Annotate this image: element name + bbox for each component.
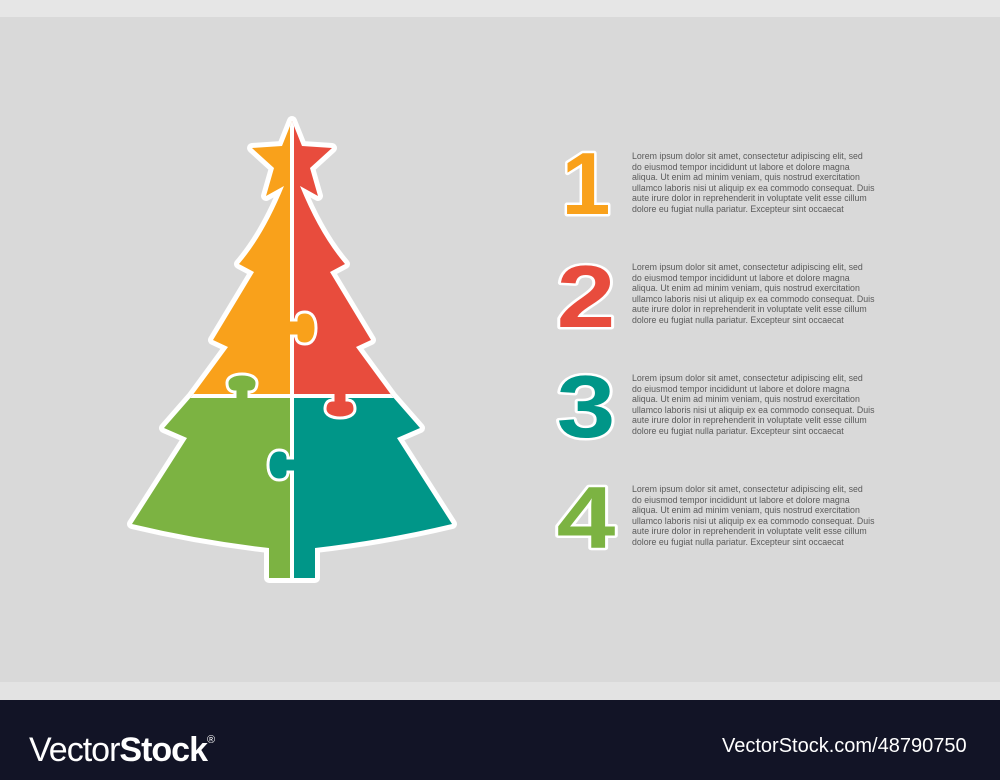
text block 1: dolore eu fugiat nulla pariatur. Excepteur sint occaecat xyxy=(632,204,844,214)
text block 3 xyxy=(632,373,875,436)
text block 2: ullamco laboris nisi ut aliquip ex ea commodo consequat. Duis xyxy=(632,294,875,304)
text block 1: ullamco laboris nisi ut aliquip ex ea commodo consequat. Duis xyxy=(632,183,875,193)
text block 4: Lorem ipsum dolor sit amet, consectetur adipiscing elit, sed xyxy=(632,484,863,494)
text block 3: ullamco laboris nisi ut aliquip ex ea commodo consequat. Duis xyxy=(632,405,875,415)
number 4: 4 xyxy=(557,468,615,567)
number 2: 2 xyxy=(557,247,615,346)
text block 2: Lorem ipsum dolor sit amet, consectetur adipiscing elit, sed xyxy=(632,262,863,272)
piece 4 green xyxy=(132,396,290,578)
puzzle pieces xyxy=(132,121,452,578)
text block 2 xyxy=(632,262,875,325)
number 1: 1 xyxy=(562,134,610,233)
text block 1: aute irure dolor in reprehenderit in voluptate velit esse cillum xyxy=(632,193,867,203)
tab red xyxy=(325,396,355,418)
text block 1: do eiusmod tempor incididunt ut labore et dolore magna xyxy=(632,162,850,172)
text block 4: do eiusmod tempor incididunt ut labore et dolore magna xyxy=(632,495,850,505)
tab orange xyxy=(292,312,316,344)
tree infographic xyxy=(127,116,618,583)
tab teal xyxy=(268,450,292,480)
text block 3: aliqua. Ut enim ad minim veniam, quis nostrud exercitation xyxy=(632,394,860,404)
text block 1 xyxy=(632,151,875,214)
text block 4: aliqua. Ut enim ad minim veniam, quis nostrud exercitation xyxy=(632,505,860,515)
text block 4: aute irure dolor in reprehenderit in voluptate velit esse cillum xyxy=(632,526,867,536)
piece 3 teal xyxy=(294,396,452,578)
text block 2: dolore eu fugiat nulla pariatur. Excepteur sint occaecat xyxy=(632,315,844,325)
text block 2: do eiusmod tempor incididunt ut labore et dolore magna xyxy=(632,273,850,283)
text block 3: Lorem ipsum dolor sit amet, consectetur adipiscing elit, sed xyxy=(632,373,863,383)
piece 2 red xyxy=(292,121,392,396)
piece 1 orange xyxy=(192,121,292,396)
text block 4: ullamco laboris nisi ut aliquip ex ea commodo consequat. Duis xyxy=(632,516,875,526)
tree outline xyxy=(132,121,452,578)
number 3: 3 xyxy=(557,357,615,456)
footer logo: VectorStock® xyxy=(29,731,214,769)
footer url: VectorStock.com/48790750 xyxy=(722,735,967,757)
tab green xyxy=(227,374,257,396)
text block 3: do eiusmod tempor incididunt ut labore et dolore magna xyxy=(632,384,850,394)
footer xyxy=(0,700,1000,780)
text block 4 xyxy=(632,484,875,547)
text block 2: aute irure dolor in reprehenderit in voluptate velit esse cillum xyxy=(632,304,867,314)
text block 1: aliqua. Ut enim ad minim veniam, quis nostrud exercitation xyxy=(632,172,860,182)
text block 1: Lorem ipsum dolor sit amet, consectetur adipiscing elit, sed xyxy=(632,151,863,161)
text block 3: aute irure dolor in reprehenderit in voluptate velit esse cillum xyxy=(632,415,867,425)
text block 4: dolore eu fugiat nulla pariatur. Excepteur sint occaecat xyxy=(632,537,844,547)
text block 3: dolore eu fugiat nulla pariatur. Excepteur sint occaecat xyxy=(632,426,844,436)
text block 2: aliqua. Ut enim ad minim veniam, quis nostrud exercitation xyxy=(632,283,860,293)
